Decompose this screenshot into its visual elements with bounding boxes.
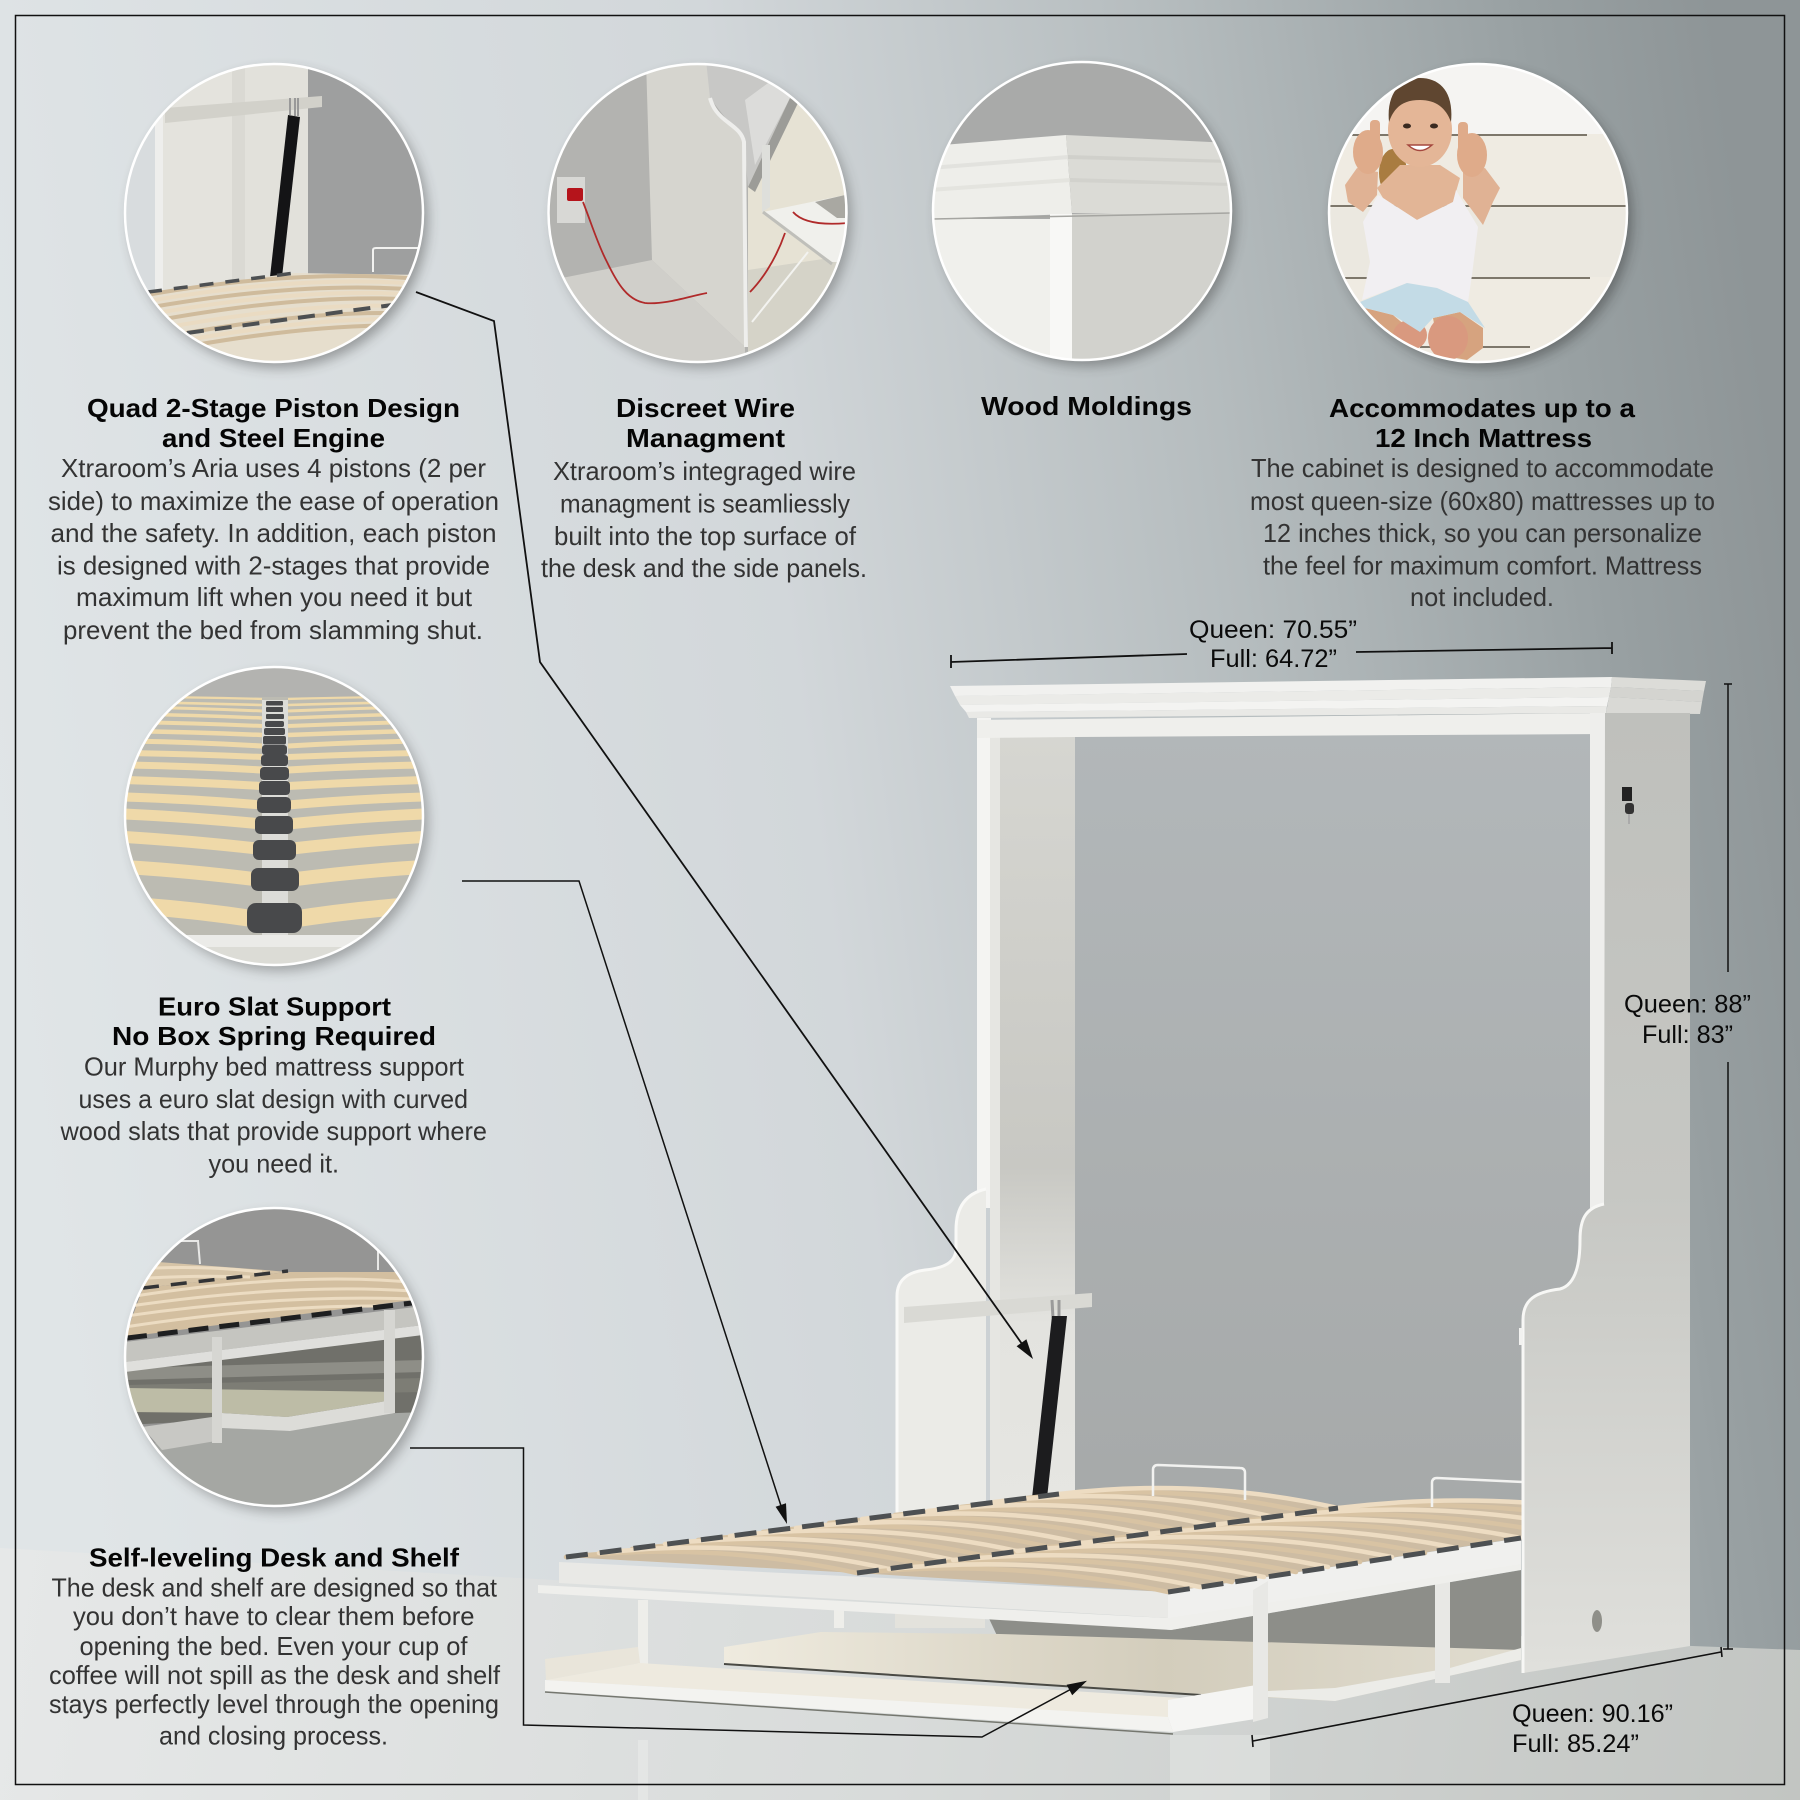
neck and chest — [1377, 165, 1460, 220]
text: self-leveling desk — [49, 1542, 501, 1750]
wooden slats — [566, 1488, 1649, 1592]
text: mattress: 12 inches thick, so you can personalize — [1263, 518, 1702, 548]
circle: woman with mattress — [1328, 64, 1632, 368]
eyes and smile — [1403, 124, 1438, 150]
slat end caps — [566, 1494, 1521, 1592]
crown molding — [950, 677, 1706, 718]
circle shelf front — [222, 1400, 395, 1431]
gray wedge behind panel — [706, 66, 790, 186]
dimension: depth: Full: 85.24” — [1512, 1730, 1639, 1758]
text: euro slats: Our Murphy bed mattress support — [84, 1052, 465, 1082]
desk arm and plate — [762, 145, 770, 178]
circle tray — [142, 1417, 222, 1450]
bed front face — [559, 1562, 1168, 1618]
text: wire management: managment is seamliessly — [560, 488, 850, 518]
circle: wood moldings — [930, 62, 1236, 366]
text: euro slats: Euro Slat Support — [158, 992, 391, 1022]
text: wood moldings: Wood Moldings — [981, 391, 1192, 421]
ponytail — [1379, 149, 1406, 184]
text: mattress — [1250, 393, 1715, 612]
front desk upright — [1253, 1581, 1268, 1722]
left slats — [125, 697, 262, 920]
text: mattress: most queen-size (60x80) mattresses up to — [1250, 486, 1715, 516]
text: piston heading and body: and Steel Engine — [162, 423, 385, 453]
arms — [1345, 168, 1500, 225]
text: self-leveling desk: you don’t have to clear them before — [73, 1601, 474, 1631]
dimension: depth — [1252, 1647, 1722, 1758]
text: mattress: 12 Inch Mattress — [1375, 423, 1592, 453]
hair — [1389, 78, 1451, 122]
leader arrow: desk — [410, 1448, 1087, 1737]
text: wire management — [541, 393, 867, 583]
floor — [0, 1548, 1800, 1800]
circle: piston detail — [125, 64, 428, 368]
text: mattress: not included. — [1410, 582, 1554, 612]
text: piston heading and body: maximum lift when you need it but — [76, 582, 473, 612]
under bed shadow area — [128, 1336, 422, 1424]
text: self-leveling desk: stays perfectly level through the opening — [49, 1689, 499, 1719]
text: self-leveling desk: coffee will not spill as the desk and shelf — [49, 1660, 501, 1690]
text: piston heading and body: side) to maximize the ease of operation — [48, 486, 499, 516]
red wires — [583, 202, 848, 303]
circle bed rail — [125, 1306, 423, 1362]
text: self-leveling desk: opening the bed. Even your cup of — [80, 1631, 468, 1661]
text: piston heading and body: and the safety. In addition, each piston — [50, 518, 496, 548]
text: mattress: the feel for maximum comfort. Mattress — [1263, 550, 1702, 580]
right slats — [288, 697, 423, 920]
cabinet back wall — [1075, 733, 1591, 1533]
text: self-leveling desk: Self-leveling Desk and Shelf — [89, 1542, 459, 1572]
text: euro slats — [60, 992, 487, 1178]
dimension: height — [1624, 684, 1751, 1649]
leader arrow: piston — [416, 292, 1033, 1359]
text: self-leveling desk: The desk and shelf are designed so that — [52, 1572, 498, 1602]
text: mattress: The cabinet is designed to accommodate — [1251, 453, 1714, 483]
dimension: width: Full: 64.72” — [1210, 645, 1337, 673]
text: mattress: Accommodates up to a — [1329, 393, 1636, 423]
murphy bed cabinet — [897, 677, 1706, 1533]
left pillar — [897, 718, 1092, 1525]
text: wire management: Discreet Wire — [616, 393, 795, 423]
text: piston heading and body: Xtraroom’s Aria uses 4 pistons (2 per — [61, 453, 486, 483]
text: euro slats: uses a euro slat design with curved — [78, 1084, 468, 1114]
dimension: depth: Queen: 90.16” — [1512, 1700, 1673, 1728]
white top — [1362, 190, 1478, 302]
dimension: height: Full: 83” — [1642, 1021, 1733, 1049]
thumbs up fists — [1353, 120, 1487, 177]
text: piston heading and body: is designed with 2-stages that provide — [57, 550, 490, 580]
wire circle floor — [564, 260, 745, 361]
side panel — [646, 60, 745, 347]
center rail — [262, 700, 288, 935]
legs and feet — [1365, 308, 1483, 360]
circle shelf top — [125, 1388, 395, 1417]
desk plate — [538, 1562, 1521, 1630]
header board — [977, 713, 1605, 738]
circle hoops — [181, 1240, 201, 1264]
circle uprights — [212, 1337, 222, 1443]
hoop handles — [1153, 1465, 1523, 1507]
circle: wire management — [548, 60, 852, 368]
rear slat section — [143, 1262, 287, 1288]
bed platform — [538, 1465, 1649, 1722]
outlet — [557, 177, 585, 223]
red plug — [567, 188, 583, 201]
text: wire management: the desk and the side panels. — [541, 553, 867, 583]
dark slat holders — [247, 701, 302, 933]
tray shelf — [545, 1600, 1268, 1734]
text: euro slats: No Box Spring Required — [112, 1021, 436, 1051]
circle: euro slats — [125, 667, 428, 971]
text: wire management: built into the top surface of — [554, 521, 857, 551]
text: piston heading and body — [48, 393, 499, 645]
text: self-leveling desk: and closing process. — [159, 1720, 388, 1750]
lock and key — [1622, 787, 1634, 824]
circle: desk and shelf — [125, 1208, 428, 1512]
leader arrow: slats — [462, 881, 787, 1524]
rear desk upright — [1435, 1556, 1450, 1683]
text: wire management: Xtraroom’s integraged wire — [553, 456, 856, 486]
denim shorts — [1360, 283, 1485, 332]
text: euro slats: wood slats that provide support where — [60, 1116, 487, 1146]
text: euro slats: you need it. — [208, 1148, 339, 1178]
right room area — [748, 98, 844, 270]
dimension: width — [951, 616, 1612, 673]
head — [1388, 100, 1452, 165]
bed under structure — [545, 1556, 1521, 1734]
text: piston heading and body: prevent the bed from slamming shut. — [63, 615, 483, 645]
slat surface — [566, 1488, 1649, 1592]
dimension: height: Queen: 88” — [1624, 990, 1751, 1018]
text: wire management: Managment — [626, 423, 785, 453]
text: piston heading and body: Quad 2-Stage Piston Design — [87, 393, 460, 423]
piston — [1032, 1300, 1067, 1498]
inner shelf — [724, 1632, 1521, 1701]
circle floor — [154, 1412, 411, 1505]
dimension: width: Queen: 70.55” — [1189, 616, 1357, 644]
main slat surface — [125, 1272, 412, 1337]
right pillar and side panel — [1519, 713, 1690, 1673]
